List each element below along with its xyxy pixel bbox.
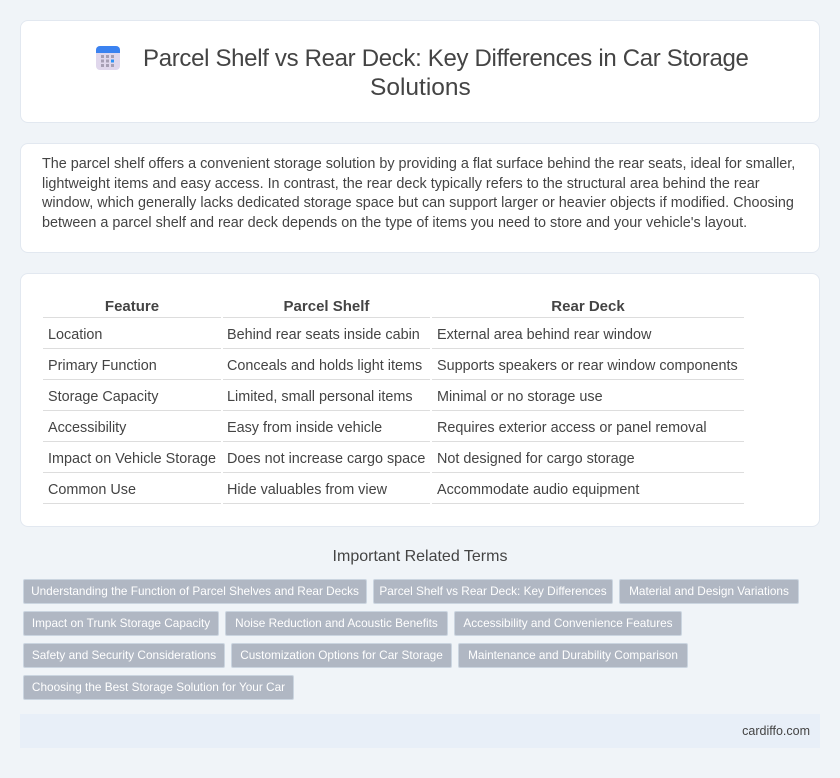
related terms tags: Safety and Security Considerations: [32, 648, 216, 662]
table rows: Primary Function: [48, 358, 157, 374]
intro paragraph: between a parcel shelf and rear deck depends on the type of items you need to store and your vehicle's layout.: [42, 214, 747, 230]
footer bar: [20, 714, 820, 748]
icon: calendar: [96, 46, 120, 70]
related terms tags: Accessibility and Convenience Features: [463, 616, 673, 630]
intro paragraph: window, which generally lacks dedicated storage space but can support larger or heavier objects if modified. Choosing: [42, 195, 794, 211]
table rows: Storage Capacity: [48, 389, 158, 405]
related terms tags: Material and Design Variations: [629, 584, 789, 598]
related terms tags: [23, 579, 799, 700]
related terms heading: Important Related Terms: [333, 548, 507, 565]
footer brand: cardiffo.com: [742, 724, 810, 738]
table rows: Requires exterior access or panel removal: [437, 420, 707, 436]
title: Parcel Shelf vs Rear Deck: Key Differences in Car Storage: [143, 45, 749, 72]
table rows: Not designed for cargo storage: [437, 451, 635, 467]
table rows: Does not increase cargo space: [227, 451, 425, 467]
related terms tags: Understanding the Function of Parcel Shelves and Rear Decks: [31, 584, 359, 598]
table rows: Conceals and holds light items: [227, 358, 422, 374]
table rows: Location: [48, 327, 102, 343]
intro paragraph: The parcel shelf offers a convenient storage solution by providing a flat surface behind the rear seats, ideal for smaller,: [42, 156, 795, 172]
related terms tags: Impact on Trunk Storage Capacity: [32, 616, 210, 630]
table header: Parcel Shelf: [284, 298, 369, 315]
table rows: Accessibility: [48, 420, 126, 436]
related terms tags: Maintenance and Durability Comparison: [468, 648, 678, 662]
title: [143, 45, 749, 101]
intro text panel: [20, 143, 820, 253]
table header: Feature: [105, 298, 159, 315]
intro paragraph: lightweight items and easy access. In contrast, the rear deck typically refers to the structural area behind the rear: [42, 176, 760, 192]
table header: [105, 298, 625, 315]
table rows: Accommodate audio equipment: [437, 482, 639, 498]
related terms tags: Noise Reduction and Acoustic Benefits: [235, 616, 438, 630]
related terms tags: Parcel Shelf vs Rear Deck: Key Differences: [379, 584, 607, 598]
table rows: Hide valuables from view: [227, 482, 387, 498]
intro paragraph: [42, 156, 795, 230]
related terms tags: Choosing the Best Storage Solution for Your Car: [32, 680, 285, 694]
header panel: [20, 20, 820, 123]
table rows: External area behind rear window: [437, 327, 651, 343]
table rows: Supports speakers or rear window components: [437, 358, 738, 374]
table rows: Common Use: [48, 482, 136, 498]
table rows: [43, 317, 744, 504]
table rows: Behind rear seats inside cabin: [227, 327, 420, 343]
table rows: Minimal or no storage use: [437, 389, 603, 405]
table header: Rear Deck: [551, 298, 625, 315]
table rows: Easy from inside vehicle: [227, 420, 382, 436]
comparison table panel: [20, 273, 820, 527]
table rows: Limited, small personal items: [227, 389, 413, 405]
related terms tags: Customization Options for Car Storage: [240, 648, 443, 662]
table rows: Impact on Vehicle Storage: [48, 451, 216, 467]
title: Solutions: [370, 74, 471, 101]
